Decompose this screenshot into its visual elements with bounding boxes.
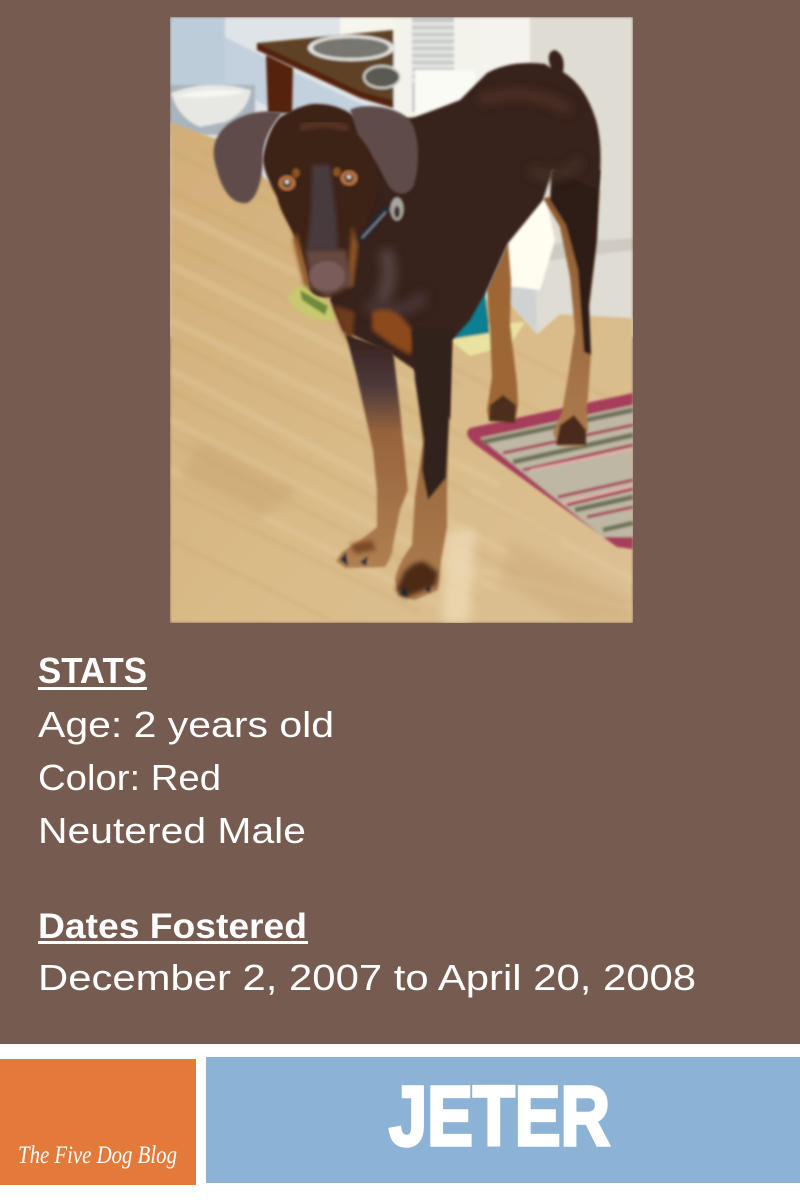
raised feeder with steel bowls [257,30,400,113]
shuttered door [395,17,480,127]
dog: middle back leg [487,243,518,423]
white water bowl [171,85,251,127]
stats: sex: Neutered Male [38,810,306,851]
dog: body highlights [365,94,580,311]
photo: Jeter the Doberman [170,17,633,623]
dog: front right leg [395,330,452,600]
stats: color: Color: Red [38,757,221,798]
brow marks [292,167,341,178]
white footer band [0,1044,800,1200]
rug [467,393,633,549]
floor [170,122,633,623]
dog: left ear [214,111,282,203]
panel: orange blog block [0,1059,196,1185]
room background [170,17,633,337]
heading: STATS: STATS [38,650,147,691]
dog: body [330,50,601,420]
collar and tags [360,197,404,240]
blog name: The Five Dog Blog [18,1142,177,1169]
stats: age: Age: 2 years old [38,704,334,745]
title: JETER: JETER [389,1069,610,1163]
dog: right ear [350,106,418,194]
bright wall behind legs [508,196,556,290]
panel: blue name block [206,1057,800,1183]
dog: far back leg [543,170,600,447]
left eye [278,175,296,191]
foster dates: December 2, 2007 to April 20, 2008 [38,957,696,998]
green mat and teal dish [287,283,525,356]
nose [309,261,345,291]
dog: front left leg [336,335,408,568]
dog: rust chest marking [372,309,413,355]
heading: Dates Fostered: Dates Fostered [38,907,307,946]
dog: head [263,104,378,297]
cabinet [530,17,633,197]
right eye [340,170,358,186]
